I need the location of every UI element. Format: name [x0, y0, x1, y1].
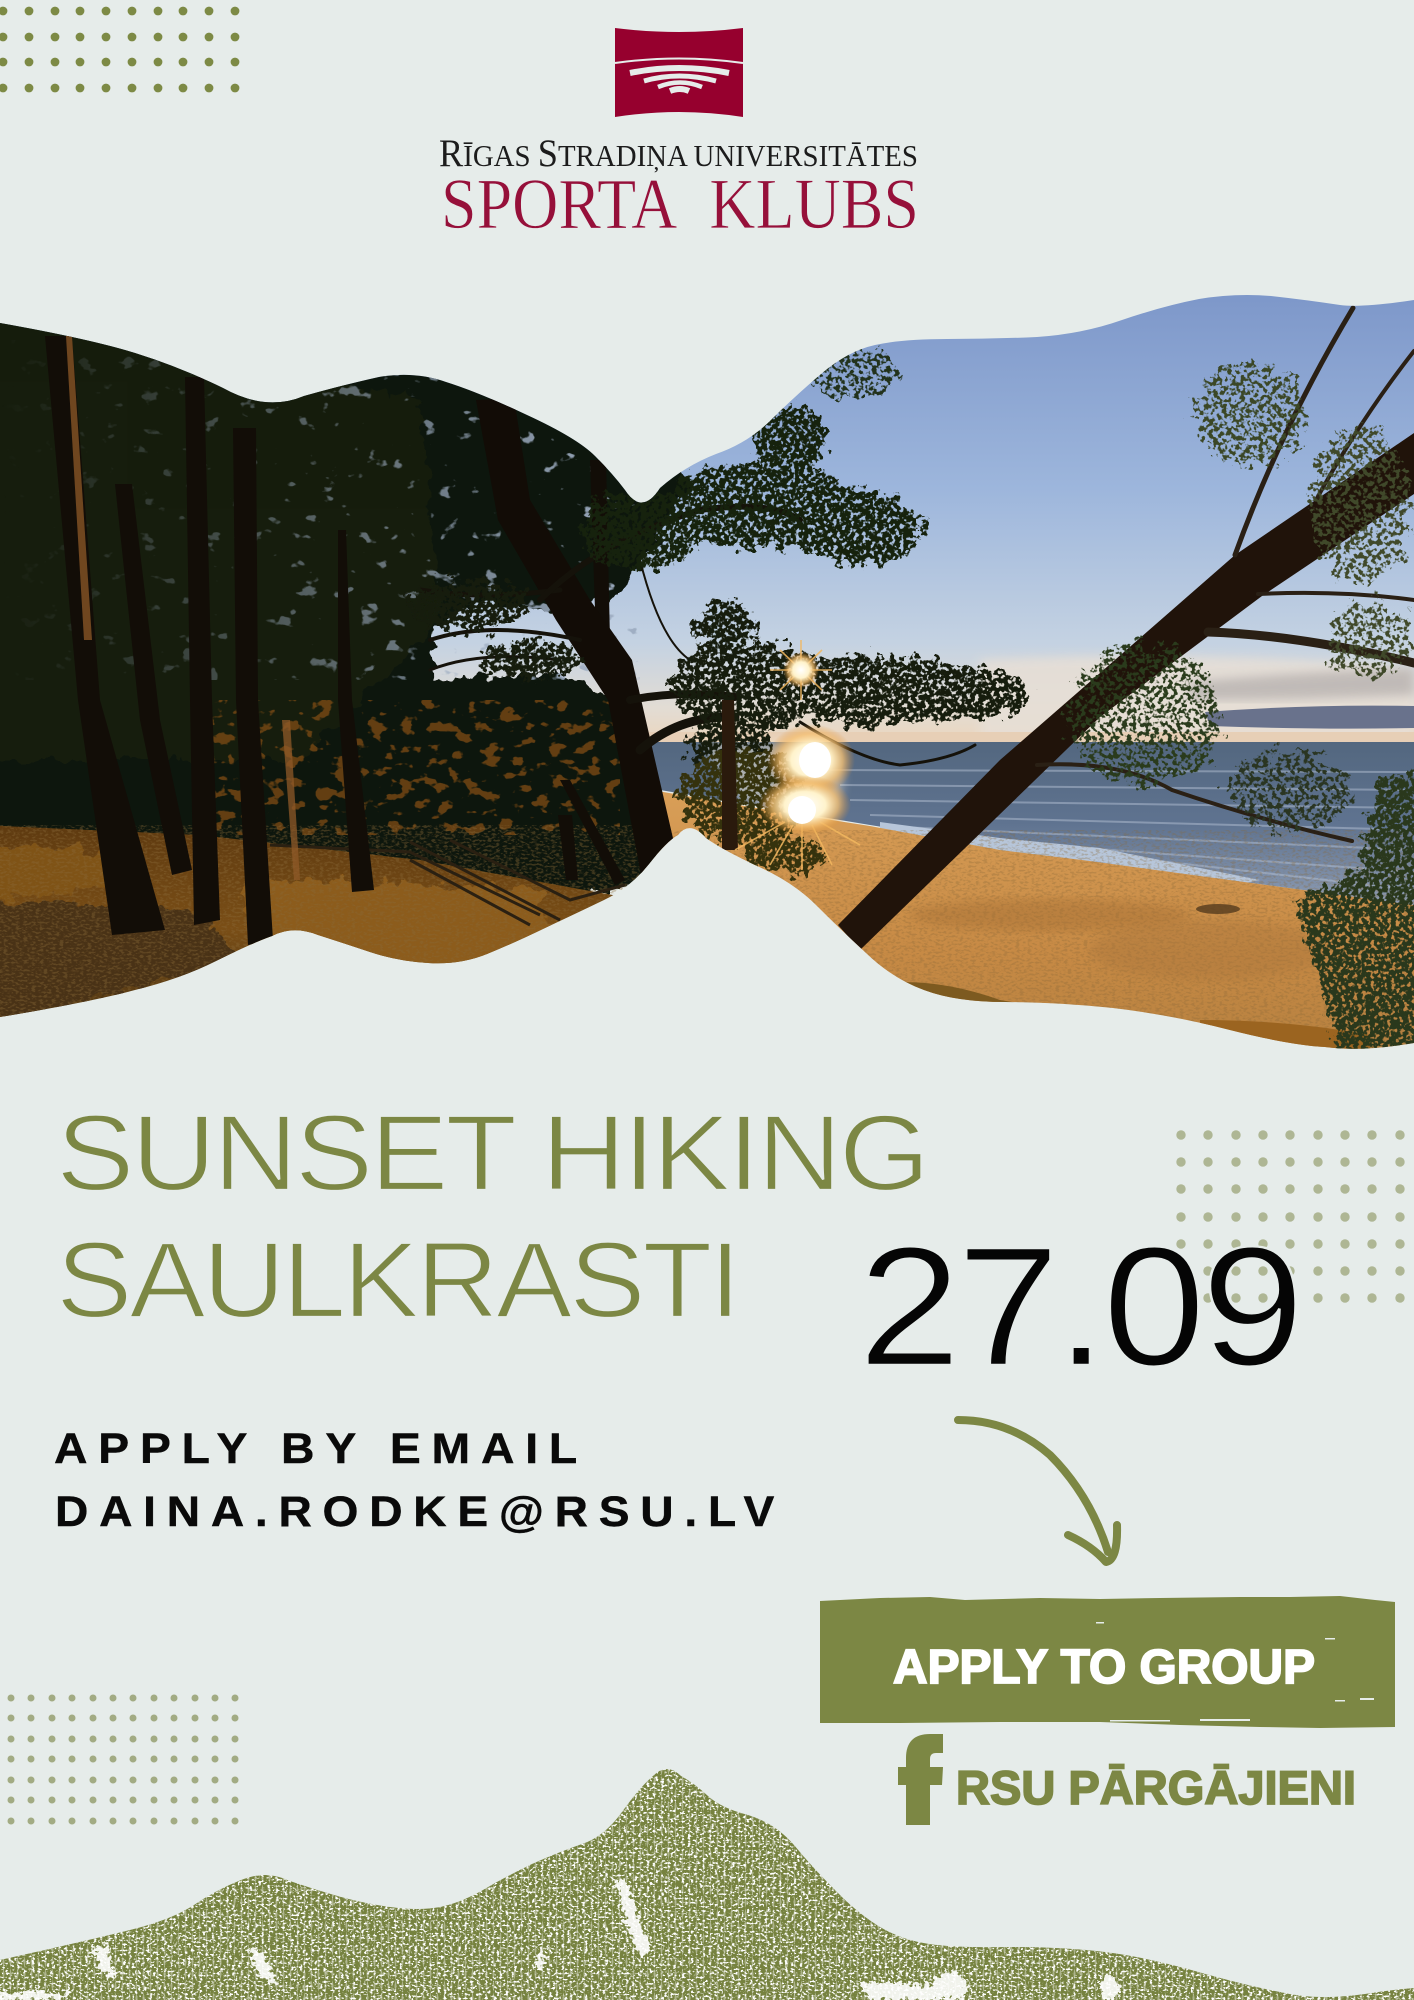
facebook group link [898, 1734, 1356, 1825]
forest ground [0, 825, 640, 1030]
icon: amphitheatre emblem [615, 28, 743, 117]
brush stroke band [820, 1596, 1395, 1728]
title line 2: SAULKRASTI [56, 1219, 738, 1340]
sun and reflections [735, 640, 860, 870]
title [56, 1092, 927, 1340]
button label: APPLY TO GROUP [893, 1641, 1315, 1694]
application instructions [54, 1425, 785, 1536]
logo: RSU sports club [439, 28, 919, 244]
bottom right pine [1295, 770, 1414, 1050]
icon: facebook f [898, 1734, 943, 1825]
wooden stairs [270, 840, 625, 925]
logo text: sporta klubs: SPORTA KLUBS [441, 164, 919, 244]
brush flecks [1096, 1622, 1374, 1722]
apply button: brush stroke [820, 1596, 1395, 1728]
sky gaps through the canopy [0, 340, 640, 680]
sky [0, 280, 1414, 745]
logo text: university name: RĪGAS STRADIŅA UNIVERSITĀTES [439, 132, 918, 175]
sea [620, 742, 1414, 905]
central sunlit pine foliage [670, 600, 1030, 775]
right tree branches [1037, 308, 1414, 841]
main leaning pine trunk [476, 398, 678, 880]
title line 1: SUNSET HIKING [56, 1092, 927, 1213]
beach shadows [906, 898, 1370, 1049]
email address: DAINA.RODKE@RSU.LV [55, 1488, 785, 1536]
diagonal leaning pine trunk [838, 433, 1414, 950]
right tree foliage [1070, 365, 1412, 830]
facebook group name: RSU PĀRGĀJIENI [956, 1761, 1356, 1814]
beach [640, 788, 1414, 1060]
orange lit bark [66, 336, 300, 880]
top right tuft of foliage [806, 346, 898, 398]
beach texture [640, 830, 1414, 1060]
white distress marks [0, 1880, 1120, 2000]
clouds [640, 656, 1414, 745]
upper canopy foliage [580, 404, 922, 570]
canopy branches [420, 507, 975, 765]
dot pattern: top left [0, 7, 239, 92]
apply by email: APPLY BY EMAIL [54, 1425, 588, 1473]
arrow [958, 1420, 1117, 1562]
dot pattern: right [1176, 1130, 1405, 1303]
textured green mountain silhouette [0, 1760, 1414, 2000]
dot pattern: bottom left [8, 1694, 238, 1824]
amber light among lower trees [200, 700, 620, 835]
forest pine trunks [45, 336, 640, 945]
foliage over the peach sky gap [410, 579, 580, 678]
photo: sunset over the beach through pine trees [0, 280, 1414, 1060]
date: 27.09 [858, 1212, 1300, 1402]
lower pine foliage and trunk [677, 700, 825, 875]
dark forest mass [0, 280, 690, 890]
